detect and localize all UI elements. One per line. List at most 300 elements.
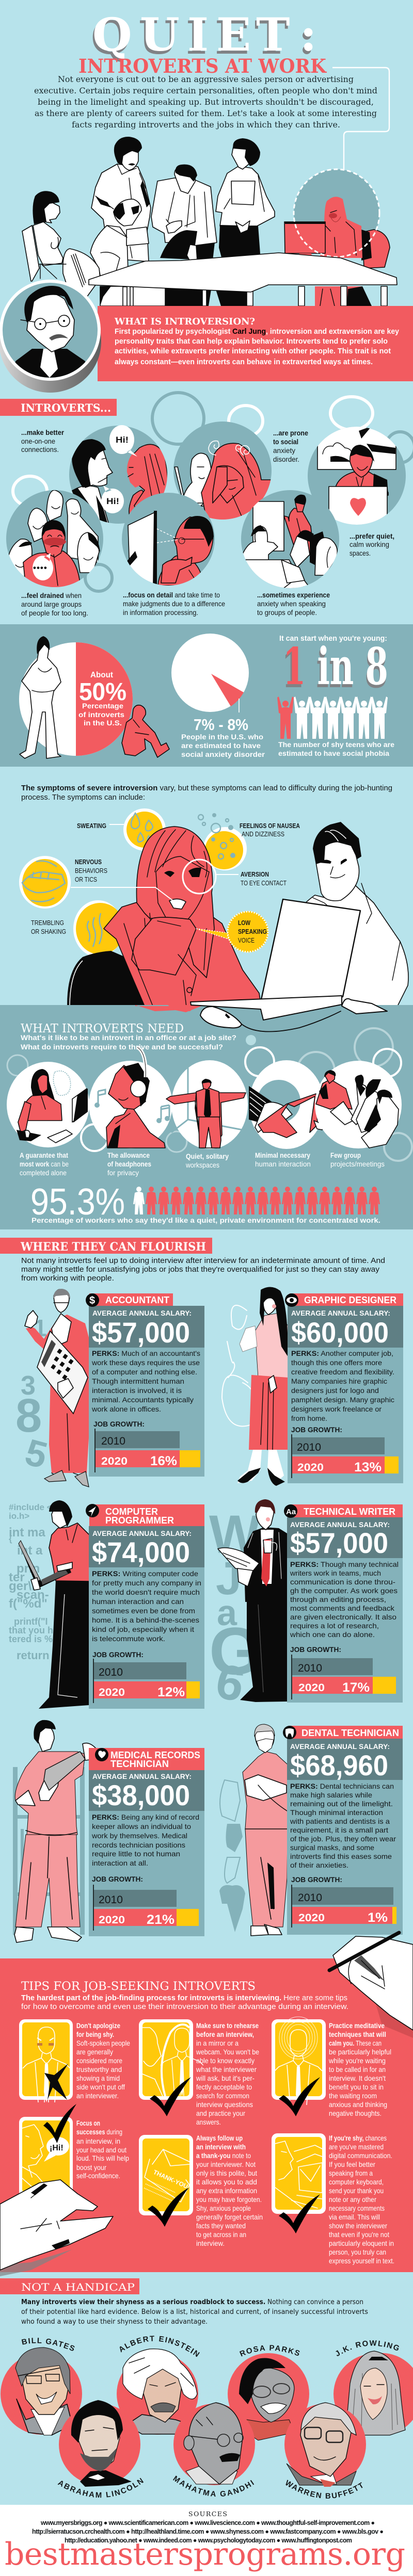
- card: AVERAGE ANNUAL SALARY:: [92, 1529, 192, 1537]
- background code: return: [17, 1649, 50, 1662]
- mouse: [200, 1007, 242, 1028]
- perks text: work alone in offices.: [91, 1405, 161, 1413]
- tip: digital communication: send your thank you: [329, 2186, 384, 2195]
- job growth chart: 12%: [157, 1685, 185, 1699]
- card: [86, 1504, 204, 1709]
- tip: digital communication: are you've mastered: [329, 2143, 384, 2151]
- foreground of desk scene: [135, 899, 387, 1032]
- tip: focus on successes: loud. This will help: [76, 2154, 129, 2162]
- tip: focus on successes: boost your: [76, 2163, 106, 2172]
- captions: needs: Quiet, solitary: [186, 1152, 229, 1160]
- stat: 1 in 8: estimated to have social phobia: [278, 749, 389, 757]
- tip: meditative techniques: benefit you to sit in: [329, 2083, 384, 2091]
- perks text: make high salaries while: [290, 1791, 372, 1799]
- pie chart: 50 percent: Percentage: [82, 702, 123, 710]
- perks text: surgical masks, and some: [290, 1843, 374, 1852]
- symptom labels: BEHAVIORS: [75, 867, 107, 874]
- heading tag: introverts: [0, 399, 117, 416]
- symptom labels: [31, 822, 300, 935]
- tip: thank-you note: your interviewer. Not: [196, 2160, 256, 2168]
- perks text: creative freedom and flexibility.: [291, 1368, 394, 1376]
- pie chart: 50 percent: About: [90, 671, 114, 679]
- tip: thank-you note: Always follow up: [196, 2134, 243, 2142]
- captions: introverts: in information processing.: [123, 608, 198, 617]
- job growth chart: 2020: [101, 1455, 128, 1467]
- tip: focus on successes: ¡Hi!: [50, 2144, 63, 2152]
- card: AVERAGE ANNUAL SALARY:: [290, 1742, 390, 1751]
- tip: meditative techniques: to be called in for an: [329, 2065, 386, 2073]
- icon: nervous mouth: [19, 856, 71, 909]
- title: [78, 8, 327, 77]
- job: medical records technician: [13, 1720, 204, 1942]
- icon: curled red woman: [122, 705, 169, 757]
- stat: 95.3 percent: [30, 1181, 380, 1224]
- background code: f("%d": [9, 1597, 47, 1611]
- tip: meditative techniques: while you're waiting: [328, 2056, 386, 2065]
- seated woman at left: [22, 191, 100, 299]
- captions: introverts: to groups of people.: [257, 608, 317, 617]
- tip: meditative techniques: interview. It doesn't: [329, 2074, 386, 2082]
- panel: what is introversion: always constant—even introverts can behave in extraverted ways at times.: [115, 358, 373, 366]
- tip: don't apologize: an interviewer.: [76, 2092, 119, 2100]
- background numerals: 5: [21, 1432, 52, 1477]
- tip: digital communication: via email. This will: [329, 2213, 380, 2221]
- perks text: though this one offers more: [291, 1358, 382, 1367]
- captions: introverts: disorder.: [273, 455, 299, 463]
- perks text: minimal. Accountants typically: [92, 1396, 194, 1404]
- card: $60,000: [291, 1316, 389, 1349]
- job: computer programmer: [9, 1500, 204, 1709]
- decorative rings: [13, 393, 413, 591]
- job: accountant: [15, 1289, 204, 1487]
- captions: introverts: [21, 428, 394, 617]
- face: [156, 856, 209, 926]
- heading: tips: [21, 1980, 348, 2011]
- captions: needs: of headphones: [107, 1160, 151, 1168]
- heading: what introverts need: WHAT INTROVERTS NEED: [21, 1022, 184, 1035]
- captions: needs: for privacy: [107, 1169, 139, 1177]
- figure: [218, 1499, 287, 1702]
- perks text: from home.: [291, 1414, 327, 1422]
- captions: introverts: around large groups: [21, 600, 82, 608]
- nervous leader line: [71, 887, 174, 902]
- need: minimal interaction: [249, 1060, 324, 1149]
- title: QUIET:: [92, 8, 316, 61]
- tip: thank-you note: any extra information: [196, 2186, 257, 2195]
- man standing at left: [91, 137, 151, 262]
- perks text: PERKS: Writing computer code: [92, 1569, 198, 1578]
- perks text: writers work in teams, much: [290, 1569, 381, 1577]
- job growth chart: 16%: [150, 1454, 177, 1468]
- need: solitary workspace: [166, 1060, 248, 1149]
- icon: nausea bubbles: [198, 813, 247, 870]
- captions: needs: A guarantee that: [20, 1151, 68, 1159]
- tip: thank-you note: only is this polite, but: [196, 2169, 257, 2177]
- symptom labels: NERVOUS: [75, 858, 102, 866]
- perks text: sometimes even be done from: [92, 1607, 195, 1615]
- tip: digital communication: speaking from a: [329, 2169, 373, 2177]
- chair: [67, 951, 184, 1005]
- card: $: [89, 1295, 95, 1306]
- tip: digital communication: [272, 2133, 394, 2265]
- scene: one-on-one conversation: [69, 425, 168, 526]
- captions: introverts: one-on-one: [21, 437, 55, 445]
- card: GRAPHIC DESIGNER: [304, 1295, 396, 1305]
- perks text: PERKS: Another computer job,: [291, 1349, 393, 1357]
- background code: printf("I: [14, 1616, 48, 1627]
- tip: digital communication: note or any other: [329, 2195, 376, 2204]
- meeting illustration: [22, 137, 397, 306]
- perks text: remaining out of the limelight.: [290, 1800, 393, 1808]
- portrait: Mahatma Gandhi: [173, 2403, 255, 2485]
- job growth chart: 2020: [298, 1682, 325, 1694]
- symptom icons: [19, 808, 247, 957]
- tip: thank-you note: it allows you to add: [196, 2178, 257, 2186]
- icon: sweating: [109, 808, 166, 851]
- symptom labels: OR TICS: [75, 876, 97, 883]
- tip: don't apologize: Soft-spoken people: [76, 2039, 130, 2047]
- red introvert at desk: [284, 197, 390, 268]
- card: $74,000: [92, 1536, 190, 1568]
- celebrity names: MAHATMA GANDHI: [173, 2475, 254, 2497]
- job growth chart: 2020: [298, 1912, 325, 1924]
- job growth chart: 2020: [99, 1687, 125, 1698]
- scene: one-on-one conversation: Hi!: [106, 496, 119, 506]
- portrait: Rosa Parks: [228, 2353, 309, 2440]
- pie chart: 50 percent: in the U.S.: [84, 719, 122, 727]
- tip: don't apologize: are generally: [76, 2048, 113, 2056]
- title: QUIET:: [91, 11, 315, 64]
- background code: tered is %: [9, 1634, 53, 1644]
- tip: digital communication: show the interviewer: [329, 2222, 387, 2230]
- tip: rehearse: interview questions: [196, 2100, 253, 2109]
- perks text: records technician positions: [92, 1841, 185, 1849]
- job growth chart: JOB GROWTH:: [290, 1646, 341, 1654]
- perks text: are given electronically. It also: [290, 1613, 396, 1621]
- background letters: a: [217, 1593, 237, 1633]
- tip: rehearse: in a mirror or a: [196, 2039, 239, 2047]
- panel: statistics band: [0, 624, 413, 767]
- job growth chart: 1%: [368, 1910, 388, 1925]
- heading: what introverts need: What's it like to be an introvert in an office or at a job site?: [21, 1033, 236, 1042]
- tip: meditative techniques: be particularly helpful: [329, 2048, 391, 2056]
- portrait: Albert Einstein: [117, 2349, 198, 2435]
- background letters: 6: [211, 1654, 249, 1713]
- tip: rehearse: will ask, but it's per-: [196, 2074, 255, 2082]
- pie chart: 7 to 8 percent: 7% - 8%: [194, 716, 248, 734]
- decorative rings: needs: [7, 1028, 412, 1161]
- celebrity names: [22, 2336, 399, 2499]
- tip: rehearse: Make sure to rehearse: [196, 2021, 259, 2030]
- portrait: Warren Buffett: [284, 2403, 366, 2487]
- job growth chart: JOB GROWTH:: [291, 1426, 342, 1434]
- sources: www.myersbriggs.org ● www.scientificamerican.com ● www.livescience.com ● www.thoughtful-self-improvement.com ●: [40, 2519, 375, 2526]
- captions: needs: The allowance: [107, 1151, 150, 1159]
- heading tag: introverts: INTROVERTS...: [21, 401, 111, 414]
- job growth chart: JOB GROWTH:: [92, 1651, 144, 1659]
- title: INTROVERTS AT WORK: [78, 55, 327, 77]
- captions: introverts: make judgments due to a difference: [123, 600, 225, 608]
- captions: needs: completed alone: [20, 1169, 67, 1177]
- job: dental technician: [219, 1724, 403, 1936]
- dashed spotlight circle: [294, 169, 379, 257]
- panel: tips for job-seeking introverts: [0, 1958, 413, 2272]
- perks text: the world doesn't require much: [92, 1588, 200, 1596]
- scene: drained in group: ••••: [33, 563, 47, 573]
- figure: [19, 1500, 89, 1709]
- handicap intro: Many introverts view their shyness as a serious roadblock to success. Nothing can convince a person: [21, 2298, 363, 2306]
- perks text: most comments and feedback: [290, 1604, 395, 1612]
- job growth chart: 2020: [99, 1914, 125, 1926]
- perks text: [92, 1569, 201, 1643]
- job growth chart: JOB GROWTH:: [93, 1420, 145, 1428]
- footer: [0, 2505, 413, 2576]
- captions: introverts: ...focus on detail and take time to: [123, 591, 220, 599]
- card: AVERAGE ANNUAL SALARY:: [291, 1309, 390, 1317]
- captions: needs: [20, 1151, 385, 1177]
- perks text: [290, 1782, 396, 1869]
- intro text: Not everyone is cut out to be an aggressive sales person or advertising: [58, 75, 354, 84]
- symptom labels: AVERSION: [241, 870, 269, 878]
- heading: tips: The hardest part of the job-finding process for introverts is interviewing. Here are some tips: [21, 1994, 347, 2002]
- perks text: of the job. Plus, they often wear: [290, 1835, 396, 1843]
- job growth chart: 13%: [354, 1460, 382, 1475]
- background swirls: [222, 1305, 257, 1426]
- tip: rehearse: fectly acceptable to: [196, 2083, 252, 2091]
- tip: digital communication: computer keyboard,: [329, 2178, 384, 2186]
- captions: introverts: spaces.: [350, 549, 371, 557]
- card: ACCOUNTANT: [105, 1295, 169, 1305]
- scene: drained in group: [6, 490, 103, 588]
- card: [283, 1726, 403, 1935]
- woman with eye magnifier: [67, 827, 261, 1011]
- tip: don't apologize: [19, 2019, 130, 2102]
- perks text: which one can do alone.: [290, 1630, 375, 1639]
- symptom labels: TO EYE CONTACT: [241, 879, 287, 887]
- scene: quiet workspace: [308, 426, 406, 526]
- tip: rehearse: answers.: [196, 2118, 221, 2126]
- tip: meditative techniques: the waiting room: [329, 2092, 377, 2100]
- card: [285, 1293, 403, 1483]
- captions: needs: Minimal necessary: [255, 1151, 310, 1159]
- tip: meditative techniques: negative thoughts.: [329, 2109, 382, 2117]
- callout: low speaking voice: SPEAKING: [238, 928, 267, 935]
- job growth chart: [92, 1651, 200, 1703]
- celebrity names: ROSA PARKS: [240, 2345, 299, 2357]
- job growth chart: 2010: [99, 1894, 123, 1906]
- laptop base: [190, 996, 342, 1020]
- stat: 1 in 8: [277, 634, 394, 757]
- background code: prin: [17, 1562, 40, 1576]
- card: MEDICAL RECORDS: [110, 1750, 200, 1760]
- symptom labels: OR SHAKING: [31, 928, 66, 935]
- stat: 95.3 percent: Percentage of workers who say they'd like a quiet, private environment for concentrated work.: [31, 1216, 380, 1224]
- tip: rehearse: webcam. You won't be: [196, 2048, 259, 2056]
- background numerals: 1: [34, 1315, 47, 1341]
- panel: what is introversion: personality traits that can help explain behavior. Introverts tend to prefer solo: [115, 337, 388, 346]
- symptoms intro: process. The symptoms can include:: [21, 793, 145, 802]
- perks text: [91, 1349, 200, 1413]
- need: headphones: [89, 1047, 172, 1148]
- perks text: interaction is involved, it is: [92, 1386, 182, 1395]
- flourish intro: from working with people.: [21, 1274, 114, 1283]
- tip: thank-you note: an interview with: [196, 2143, 246, 2151]
- perks text: of their anxieties.: [290, 1861, 348, 1869]
- captions: introverts: anxiety when speaking: [257, 600, 326, 608]
- perks text: communication is done throu-: [290, 1578, 395, 1586]
- perks text: PERKS: Being any kind of record: [92, 1813, 199, 1821]
- tip: focus on successes: [19, 2104, 129, 2197]
- panel: what is introversion: activities, while extraverts prefer interacting with other people. This trait is not: [115, 347, 391, 355]
- handicap intro: who found a way to use their shyness to their advantage.: [21, 2318, 208, 2326]
- heading: what introverts need: [21, 1022, 236, 1051]
- job growth chart: [290, 1646, 396, 1699]
- celebrity names: ALBERT EINSTEIN: [120, 2336, 200, 2357]
- flourish intro: Not many introverts feel up to doing interview after interview for an indeterminate amount of time. And: [21, 1257, 385, 1265]
- card: [86, 1293, 204, 1477]
- tip: thank-you note: Shy, anxious people: [196, 2204, 251, 2212]
- tip: thank-you note: to get across in an: [196, 2230, 246, 2239]
- intro text: being in the limelight and speaking up. But introverts shouldn't be discouraged,: [38, 98, 374, 107]
- tip: thank-you note: THANK-YOU: [152, 2168, 189, 2190]
- stat: 1 in 8: The number of shy teens who are: [278, 740, 394, 749]
- panel: what is introversion: [98, 306, 413, 381]
- tip: thank-you note: generally forget certain: [196, 2213, 263, 2221]
- tip: don't apologize: side won't put off: [76, 2083, 125, 2091]
- heading tag: where they can flourish: WHERE THEY CAN FLOURISH: [20, 1240, 206, 1254]
- intro text: facts regarding introverts and the jobs in which they can thrive.: [72, 120, 340, 129]
- card: $68,960: [290, 1749, 388, 1781]
- job growth chart: JOB GROWTH:: [92, 1875, 143, 1883]
- job growth chart: 2010: [297, 1441, 321, 1453]
- pie chart: 7 to 8 percent: social anxiety disorder: [181, 750, 265, 758]
- scene: social anxiety: [173, 422, 273, 521]
- heading: what introverts need: What do introverts require to thrive and be successful?: [21, 1043, 223, 1051]
- long hair: [136, 827, 214, 978]
- tip: focus on successes: your head and out: [76, 2146, 126, 2154]
- tip: don't apologize: trustworthy and: [76, 2065, 122, 2073]
- perks text: keeper allows an individual to: [92, 1822, 191, 1830]
- need: few group projects: [315, 1061, 402, 1148]
- captions: needs: most work can be: [20, 1160, 69, 1168]
- perks text: [290, 1560, 399, 1639]
- tip: focus on successes: self-confidence.: [76, 2172, 120, 2180]
- symptoms intro: [21, 784, 392, 802]
- sources: http://education.yahoo.net ● www.indeed.com ● www.psychologytoday.com ● www.huffingtonpost.com: [65, 2537, 352, 2544]
- perks text: is telecommute work.: [92, 1634, 165, 1643]
- tip: meditative techniques: anxious and thinking: [329, 2100, 387, 2109]
- perks text: Many companies hire graphic: [291, 1377, 387, 1385]
- heading: tips: TIPS FOR JOB-SEEKING INTROVERTS: [21, 1980, 256, 1993]
- perks text: requires a lot of research,: [290, 1622, 379, 1630]
- job growth chart: [291, 1876, 396, 1927]
- hand reaching from left: [0, 2180, 113, 2276]
- captions: introverts: to social: [273, 438, 298, 446]
- tip: digital communication: If you're shy, chances: [329, 2134, 387, 2142]
- flourish intro: many might settle for unsatisfying jobs or jobs that they're overqualified for just so they can stay away: [21, 1266, 380, 1274]
- background code: int a: [17, 1544, 43, 1558]
- hand with pen: [329, 1933, 413, 2038]
- perks text: kind of job, especially when it: [92, 1625, 194, 1633]
- job growth chart: [92, 1875, 199, 1931]
- job growth chart: [291, 1426, 399, 1478]
- perks text: require little to not human: [92, 1850, 180, 1858]
- tip: rehearse: [139, 2019, 259, 2126]
- under-table legs: [100, 286, 387, 306]
- job growth chart: 17%: [342, 1680, 370, 1695]
- tip: rehearse: before an interview,: [196, 2030, 254, 2038]
- tip: meditative techniques: calm you. These can: [329, 2039, 382, 2047]
- card: [89, 1748, 204, 1936]
- background code: int ma: [9, 1526, 45, 1540]
- meeting table: [89, 253, 397, 292]
- celebrity names: BILL GATES: [22, 2338, 74, 2351]
- handicap intro: [21, 2298, 368, 2326]
- tip: don't apologize: Don't apologize: [76, 2021, 120, 2030]
- perks text: pamphlet design. Many graphic: [291, 1396, 394, 1404]
- scene: focus on detail: [122, 493, 215, 588]
- background code: ter: [9, 1570, 25, 1584]
- panel: what is introversion: First popularized by psychologist Carl Jung, introversion and extraversion are key: [115, 327, 400, 336]
- job growth chart: 2010: [298, 1892, 322, 1904]
- captions: needs: workspaces: [185, 1161, 219, 1169]
- pie chart: 7 to 8 percent: People in the U.S. who: [181, 733, 263, 741]
- background letters: W: [209, 1504, 260, 1565]
- captions: introverts: connections.: [21, 445, 59, 453]
- figure: [243, 1724, 288, 1936]
- tip: meditative techniques: Practice meditative: [329, 2021, 385, 2030]
- perks text: work by themselves. Medical: [91, 1832, 187, 1840]
- captions: introverts: calm working: [350, 540, 389, 548]
- job growth chart: 2010: [298, 1662, 322, 1674]
- magnifier ring: [183, 860, 216, 894]
- tip: digital communication: person, you truly can: [329, 2248, 386, 2256]
- sources: SOURCES: [188, 2510, 227, 2518]
- card: AVERAGE ANNUAL SALARY:: [92, 1309, 192, 1317]
- flourish intro: [21, 1257, 385, 1283]
- perks text: with patients and dentists is a: [290, 1817, 390, 1825]
- background bookshelf: [13, 1767, 85, 1935]
- callout: low speaking voice: VOICE: [238, 936, 255, 944]
- background numerals: [15, 1315, 52, 1477]
- tip: thank-you note: a thank-you note to: [196, 2151, 251, 2160]
- connector line to introvert: [332, 68, 389, 171]
- job growth chart: 2020: [297, 1462, 324, 1473]
- pie chart: 7 to 8 percent: are estimated to have: [181, 741, 261, 750]
- laptop screen: [261, 899, 360, 1002]
- intro text: [34, 75, 377, 129]
- heading tag: not a handicap: NOT A HANDICAP: [21, 2281, 135, 2293]
- tip: digital communication: necessary comments: [329, 2204, 385, 2212]
- captions: introverts: ...make better: [21, 428, 65, 436]
- pie chart: 50 percent: [19, 642, 133, 756]
- card: TECHNICAL WRITER: [304, 1506, 395, 1517]
- callout: low speaking voice: [196, 911, 268, 952]
- tip: meditative techniques: techniques that will: [329, 2030, 386, 2038]
- stat: 1 in 8: It can start when you're young:: [279, 634, 387, 643]
- tip: rehearse: what the interviewer: [196, 2065, 257, 2073]
- portrait: Carl Jung: [0, 280, 101, 393]
- figure: [25, 1289, 91, 1487]
- perks text: [291, 1349, 394, 1422]
- celebrity names: ABRAHAM LINCOLN: [58, 2477, 144, 2498]
- job growth chart: 2010: [99, 1666, 123, 1678]
- captions: introverts: anxiety: [273, 446, 295, 455]
- job growth chart: JOB GROWTH:: [291, 1876, 342, 1884]
- tip: don't apologize: for being shy.: [76, 2030, 114, 2038]
- captions: needs: human interaction: [255, 1160, 311, 1168]
- tip: digital communication: express yourself in text.: [329, 2257, 394, 2265]
